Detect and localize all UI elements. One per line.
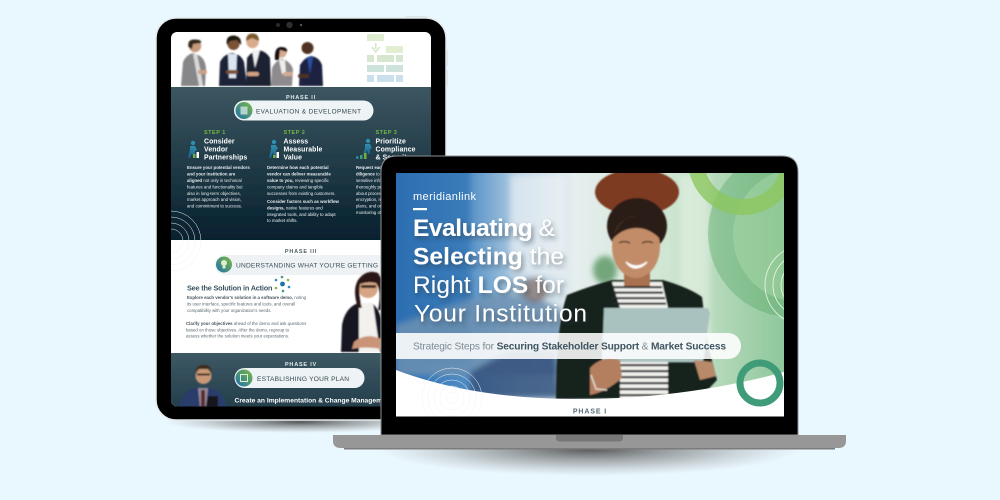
step 3: STEP 3 (376, 130, 397, 136)
step 3 body: monitoring of systems. (356, 210, 399, 215)
hero background (396, 173, 784, 417)
title: Selecting the (413, 244, 564, 270)
person 5 (298, 42, 323, 86)
step 2 body: company claims and tangible (267, 184, 324, 189)
photo: man in suit (179, 365, 226, 407)
step 1 body: aligned not only in technical (187, 178, 242, 183)
step 2 title: Assess (284, 138, 308, 146)
step 3 body: encryption, recovery (356, 197, 396, 202)
logo: meridianlink: meridianlink (413, 191, 476, 203)
step 3 title: Compliance (376, 146, 416, 154)
subtitle pill: Strategic Steps for Securing Stakeholder Support & Market Success (413, 342, 726, 352)
step 1 body: and commitment to success. (187, 204, 242, 209)
step 3 body: diligence to ensure that (356, 172, 403, 176)
step 3 title: & Security (376, 154, 411, 162)
phase IV heading: Create an Implementation & Change Management Plan (234, 398, 408, 404)
pill: establishing your plan (234, 368, 364, 388)
step 1: STEP 1 (204, 130, 226, 136)
step 2 body: vendor can deliver measurable (267, 172, 331, 176)
decorative arcs (171, 210, 202, 271)
step 1 body: features and functionality but (187, 184, 243, 189)
step 3 body: thoroughly protected. Ask (356, 184, 406, 189)
icon: climbing figure 3 (356, 139, 372, 159)
laptop device (333, 156, 846, 450)
tablet body (156, 18, 446, 420)
green ring (740, 363, 780, 403)
step 3 title: Prioritize (376, 138, 406, 146)
step 2 title: Value (284, 154, 302, 162)
phase II label: PHASE II (286, 95, 316, 101)
decorative rings (422, 368, 482, 428)
step 1 (187, 130, 250, 209)
step 2 body: Determine how each potential (267, 165, 329, 170)
phase III body: compatibility with your organization's needs. (187, 308, 272, 313)
tablet screen (171, 32, 431, 406)
logo: meridianlink (413, 191, 476, 210)
laptop notch (556, 435, 623, 442)
icon: climbing figure 1 (188, 141, 199, 158)
pill: evaluation and development (234, 100, 374, 120)
person 1 (181, 39, 207, 86)
title: Evaluating & (413, 215, 555, 242)
person 2 (219, 36, 247, 86)
tablet camera (276, 22, 302, 28)
panel: phase IV (171, 353, 380, 406)
icon: climbing figure 2 (269, 140, 279, 158)
title: Your Institution (414, 300, 587, 328)
step 2 body: integrated tools, and ability to adapt (267, 212, 336, 217)
photo: smiling woman with tablet (556, 169, 717, 400)
icon: network cluster (275, 276, 290, 292)
base lower edge (344, 448, 835, 450)
step 3 (356, 130, 416, 215)
tablet side buttons (405, 16, 448, 87)
step 2 body: to market shifts. (267, 218, 298, 223)
photo: five business people (181, 34, 323, 86)
pill: establishing your plan: ESTABLISHING YOUR PLAN (257, 376, 349, 383)
step 2 body: designs, native features and (267, 205, 323, 210)
white wave (396, 370, 784, 417)
person 3 (246, 34, 271, 86)
step 3 body: plans, and ongoing (356, 204, 393, 209)
photo: woman with glasses (341, 272, 381, 352)
phase I label: PHASE I (573, 408, 607, 416)
blurred office backdrop (380, 165, 710, 398)
step 2: STEP 2 (284, 130, 305, 136)
step 2 body: Consider factors such as workflow (267, 199, 340, 204)
step 3 body: Request each vendor's due (356, 165, 413, 170)
step 1 title: Consider (204, 138, 235, 146)
hands (590, 359, 622, 395)
title (413, 215, 587, 328)
step 2 (267, 130, 340, 223)
phase III body: Clarify your objectives ahead of the demo and ask questions (186, 321, 306, 326)
tablet device (141, 16, 448, 420)
step 1 body: and your institution are (187, 172, 236, 176)
laptop base (333, 435, 846, 448)
panel: phase III (171, 210, 380, 353)
laptop lid (381, 156, 798, 435)
step 3 body: about processes for (356, 191, 395, 196)
phase III body: its user interface, specific features and tools, and overall (187, 302, 295, 306)
step 2 title: Measurable (284, 146, 322, 154)
pill: understanding what you're getting: UNDERSTANDING WHAT YOU'RE GETTING (236, 262, 378, 270)
panel: phase II (171, 87, 431, 240)
step 3 body: sensitive information is (356, 178, 401, 183)
phase III body: Explore each vendor's solution in a software demo, noting (187, 295, 306, 300)
device in hands (602, 308, 710, 362)
subtitle pill (380, 333, 741, 359)
step 1 body: market approach and vision, (187, 197, 242, 202)
green circles (696, 113, 876, 325)
step 1 title: Partnerships (204, 154, 247, 162)
pill: understanding what you're getting (215, 255, 380, 275)
phase IV label: PHASE IV (285, 362, 317, 368)
neck and face (624, 262, 650, 286)
jacket (556, 280, 717, 399)
striped top (612, 282, 668, 400)
hair (595, 169, 679, 215)
phase III body: based on those objectives. After the demo, regroup to (186, 328, 290, 332)
step 1 body: Ensure your potential vendors (187, 165, 250, 170)
laptop screen (396, 173, 784, 416)
tablet shadow (165, 411, 435, 433)
phase III body: assess whether the solution meets your expectations. (186, 334, 289, 338)
heading: see the solution in action: See the Solution in Action (187, 284, 272, 292)
title: Right LOS for (413, 272, 564, 299)
step 2 body: value to you, reviewing specific (267, 178, 329, 183)
step 1 title: Vendor (204, 146, 228, 154)
pill: evaluation and development: EVALUATION & DEVELOPMENT (256, 108, 361, 115)
flow diagram graphic (367, 34, 403, 82)
person 4 (271, 47, 293, 86)
step 1 body: also in long-term objectives, (187, 191, 241, 196)
step 2 body: successes from existing customers. (267, 191, 336, 196)
laptop shadow (380, 422, 800, 476)
phase III label: PHASE III (285, 249, 317, 255)
